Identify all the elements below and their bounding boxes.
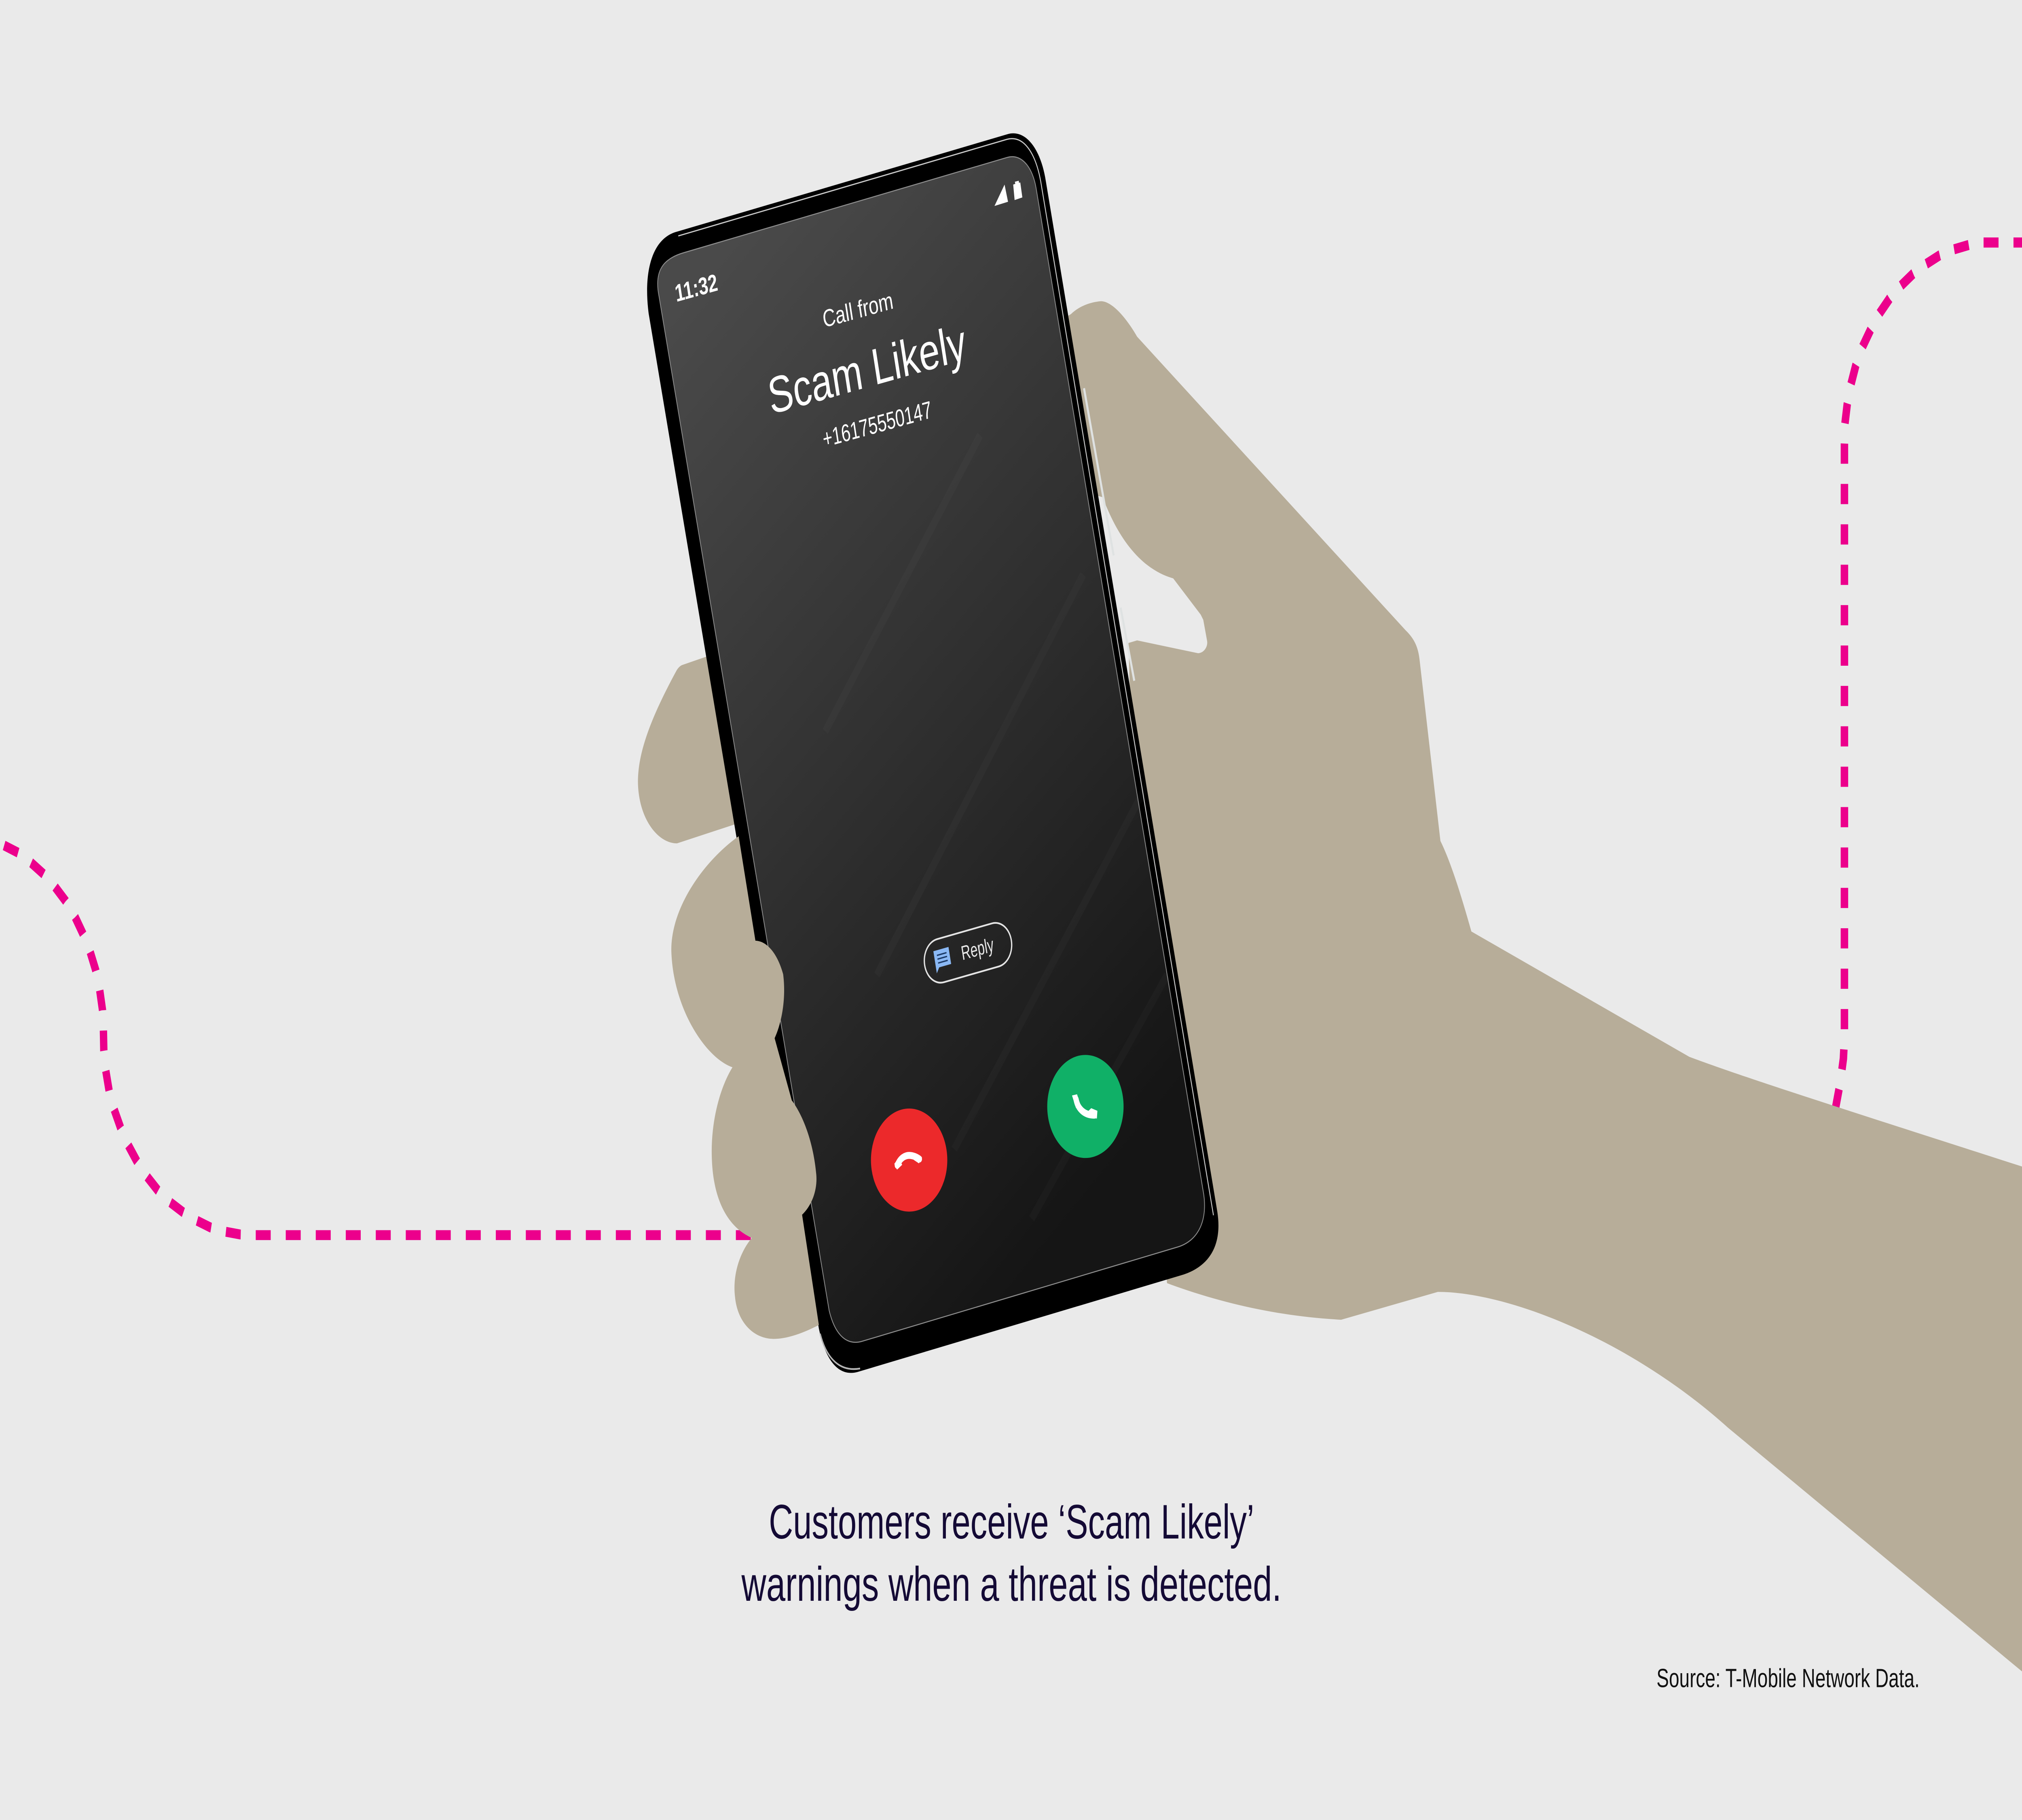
side buttons bbox=[1084, 388, 1134, 681]
red circle bbox=[871, 1109, 947, 1212]
index finger behind the phone bbox=[638, 651, 748, 843]
icon: message bubble bbox=[933, 947, 952, 973]
screen bbox=[658, 157, 1205, 1342]
hand and arm bbox=[1058, 301, 2022, 1672]
bottom corner highlight bbox=[820, 1334, 860, 1369]
phone bbox=[647, 133, 1218, 1373]
body highlight bbox=[678, 139, 1214, 1215]
reply pill outline bbox=[921, 919, 1015, 987]
decline button bbox=[871, 1109, 947, 1212]
source note: Source: T-Mobile Network Data. bbox=[1656, 1664, 1920, 1693]
dashed line: right bbox=[1831, 243, 2022, 1132]
answer button bbox=[1047, 1055, 1123, 1158]
green circle bbox=[1047, 1055, 1123, 1158]
icon: hang up handset bbox=[897, 1155, 920, 1165]
handset ends bbox=[1072, 1094, 1098, 1118]
fingers in front of the phone bbox=[671, 836, 819, 1339]
clock: 11:32 bbox=[673, 269, 719, 307]
dashed line: left bbox=[4, 845, 761, 1235]
caption: warnings when a threat is detected. bbox=[741, 1558, 1282, 1611]
phone body bbox=[647, 133, 1218, 1373]
reply button bbox=[921, 919, 1015, 987]
phone number: +16175550147 bbox=[821, 396, 933, 453]
icon: signal bbox=[994, 184, 1008, 206]
icon: battery bbox=[1013, 181, 1022, 200]
call from label: Call from bbox=[821, 287, 895, 333]
reply label: Reply bbox=[960, 934, 995, 965]
caller name: Scam Likely bbox=[764, 313, 970, 425]
icon: phone handset bbox=[1076, 1100, 1094, 1115]
handset ends bbox=[894, 1154, 922, 1170]
caption: Customers receive ‘Scam Likely’ bbox=[769, 1495, 1254, 1549]
